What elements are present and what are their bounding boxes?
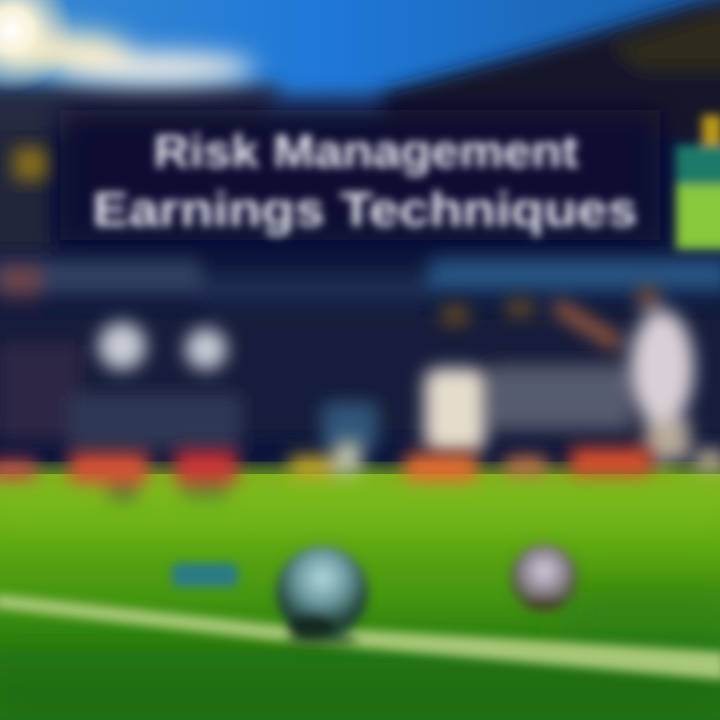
- blue logo on pitch: [172, 563, 238, 587]
- sun glare: [10, 32, 255, 84]
- pitch: [0, 474, 720, 720]
- score icons: [98, 322, 227, 370]
- players: [424, 286, 694, 515]
- mid band: [0, 258, 720, 450]
- white pitch line: [0, 594, 720, 680]
- football: large: [276, 546, 368, 647]
- title: [92, 125, 638, 237]
- football: small: [510, 544, 578, 612]
- sky: [0, 0, 720, 140]
- advertising boards: [0, 442, 720, 500]
- title: Earnings Techniques: [92, 184, 638, 237]
- side mark: [14, 148, 46, 180]
- scoreboard accent: [676, 115, 720, 250]
- title: Risk Management: [154, 125, 578, 177]
- pitch shading: [0, 495, 720, 720]
- title panel: [60, 110, 660, 240]
- stands background: [0, 0, 720, 490]
